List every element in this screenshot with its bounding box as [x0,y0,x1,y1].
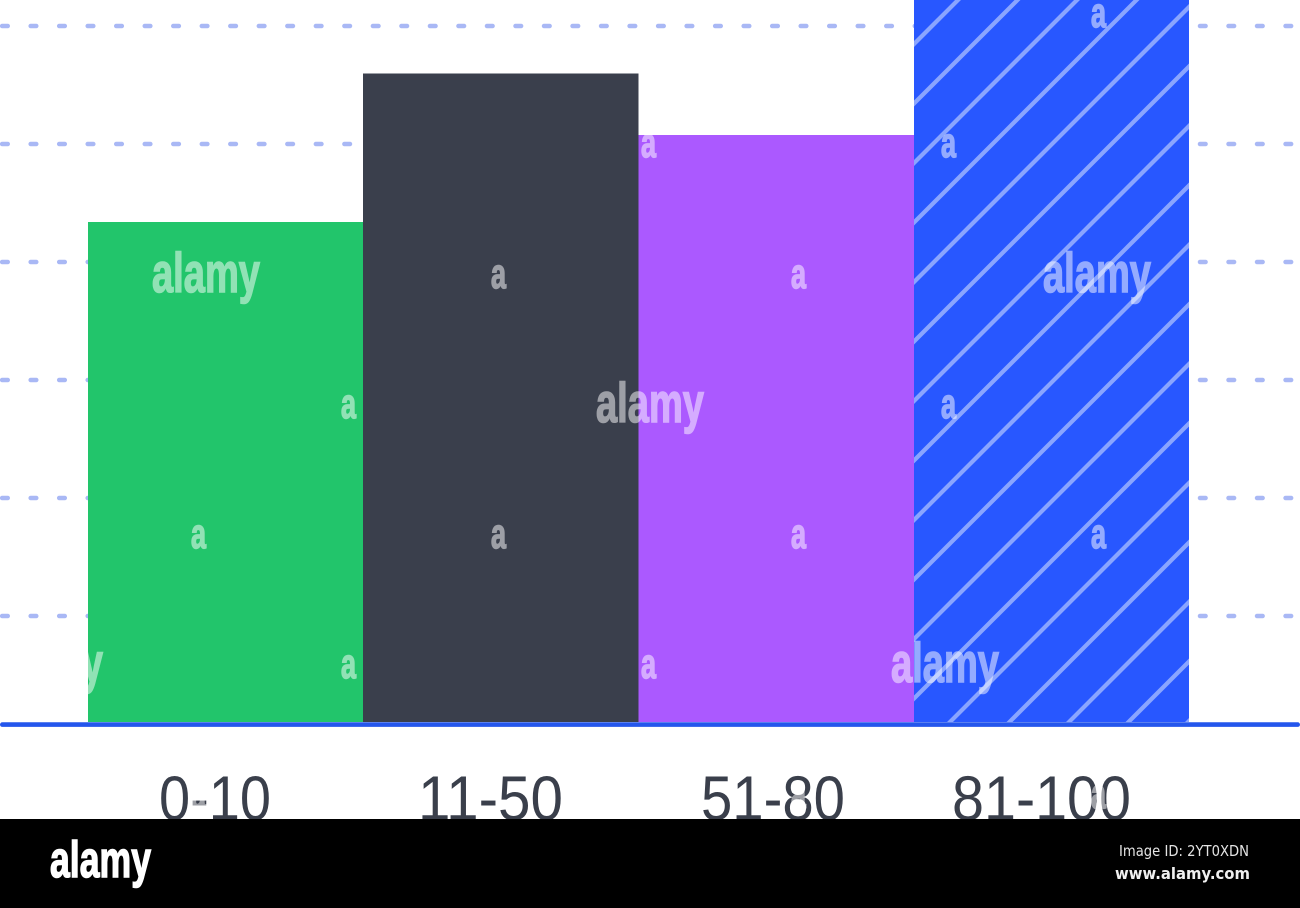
footer logo: alamy [50,831,151,888]
label: 11-50: 11-50 [418,764,563,834]
bar: 11-50 [363,74,638,722]
watermarks: a [941,380,956,427]
axis labels [159,764,1131,834]
x-axis line [0,722,1300,727]
watermarks: a [641,640,656,687]
watermarks: a [791,250,806,297]
watermarks: a [1091,770,1106,817]
watermarks: alamy [596,371,704,434]
website: www.alamy.com [1115,864,1250,883]
footer bar [0,819,1300,908]
watermarks [0,0,1151,817]
watermarks: a [191,770,206,817]
watermarks: a [791,770,806,817]
watermarks: a [491,250,506,297]
watermarks: alamy [891,631,999,694]
label: 51-80: 51-80 [701,764,845,834]
image id: Image ID: 2YT0XDN [1119,842,1249,860]
bar: 81-100 hatched [914,0,1189,722]
watermarks: a [341,640,356,687]
watermarks: a [341,380,356,427]
watermarks: alamy [1043,241,1151,304]
watermarks: a [941,119,956,166]
watermarks: a [191,510,206,557]
watermarks: alamy [152,241,260,304]
bar: 0-10 [88,222,363,722]
bar: 51-80 [638,135,914,722]
watermarks: a [491,510,506,557]
bar chart: score ranges [88,0,1200,772]
watermarks: a [641,119,656,166]
watermarks: a [1091,510,1106,557]
watermarks: a [791,510,806,557]
label: 0-10: 0-10 [159,764,271,834]
label: 81-100: 81-100 [952,764,1131,834]
